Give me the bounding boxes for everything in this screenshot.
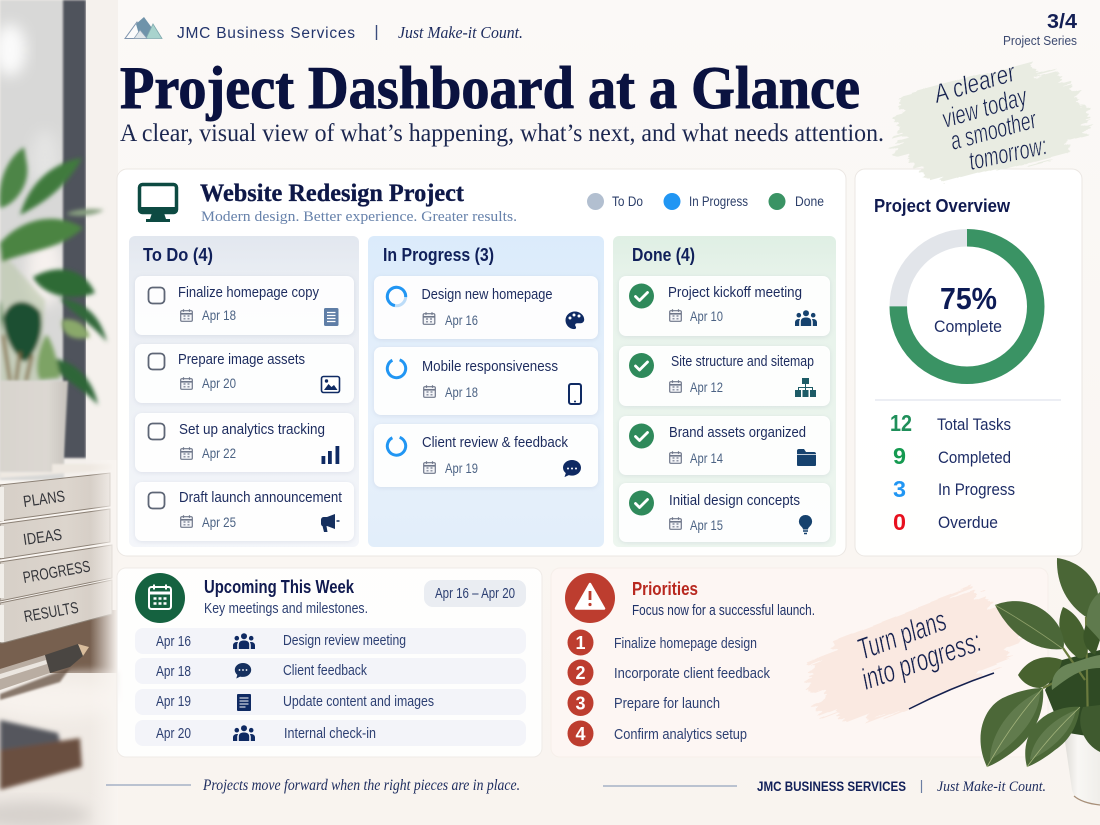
priority 2: Incorporate client feedback [614, 666, 771, 682]
logo: JMC mountains [125, 17, 162, 38]
callout: A clearer view today a smoother tomorrow: view today [938, 81, 1032, 134]
row: Apr 19 update content and images: Apr 19 [156, 694, 191, 710]
date range chip: Apr 16 – Apr 20 [435, 586, 515, 602]
priority 1: Finalize homepage design [614, 636, 757, 652]
task: Client review & feedback: Apr 19 [445, 461, 478, 476]
notebook [0, 720, 82, 790]
task: Set up analytics tracking [135, 413, 354, 472]
plant: potted plant bottom right [980, 558, 1100, 805]
priority 4: 4 [575, 724, 586, 744]
priority 4: Confirm analytics setup [614, 727, 747, 743]
books stack: PROGRESS [22, 558, 92, 587]
callout: A clearer view today a smoother tomorrow: tomorrow: [966, 130, 1050, 176]
task: Brand assets organized: Brand assets organized [669, 424, 806, 441]
callout: Turn plans into progress: into progress: [858, 625, 986, 697]
row: Apr 18 client feedback [135, 658, 526, 684]
overview heading: Project Overview [874, 195, 1011, 216]
donut chart 75% [898, 238, 1036, 375]
panel: upcoming this week [117, 568, 542, 757]
panel: project overview [855, 169, 1082, 556]
stat: completed [893, 443, 1011, 469]
stat: in progress: 3 [893, 476, 906, 502]
books stack [0, 473, 112, 643]
stat: overdue: 0 [893, 509, 906, 535]
task: Project kickoff meeting: Project kickoff meeting [668, 284, 802, 301]
footer brand: JMC BUSINESS SERVICES [757, 779, 906, 794]
books stack: RESULTS [23, 600, 80, 626]
task: Design new homepage: Apr 16 [445, 313, 478, 328]
column: In Progress [368, 236, 604, 547]
task: Draft launch announcement: Draft launch announcement [179, 489, 343, 506]
task: Initial design concepts: Apr 15 [690, 518, 723, 533]
legend [587, 193, 824, 210]
task: Finalize homepage copy: Apr 18 [202, 308, 236, 323]
brand tagline: Just Make-it Count. [398, 23, 523, 42]
task: Project kickoff meeting: Apr 10 [690, 309, 723, 324]
callout: Turn plans into progress: Turn plans [853, 604, 951, 667]
row: Apr 20 internal check-in: Apr 20 [156, 726, 191, 742]
row: Apr 16 design review meeting [135, 628, 526, 654]
callout: A clearer view today a smoother tomorrow: a smoother [947, 104, 1040, 156]
task: Site structure and sitemap: Apr 12 [690, 380, 723, 395]
task: Project kickoff meeting [619, 276, 830, 336]
project title: Website Redesign Project [200, 180, 465, 207]
column heading: To Do (4) [143, 245, 213, 265]
blurred left plant [0, 147, 107, 405]
stat: in progress: In Progress [938, 480, 1015, 499]
footer brand: Just Make-it Count. [937, 779, 1046, 795]
dark foliage cluster [1045, 650, 1100, 738]
priorities subtitle: Focus now for a successful launch. [632, 603, 815, 619]
priority 3: Prepare for launch [614, 696, 720, 712]
donut chart 75%: 75% [940, 281, 997, 316]
stat: total tasks: Total Tasks [937, 415, 1011, 434]
footer quote: Projects move forward when the right pieces are in place. [202, 777, 520, 794]
task: Brand assets organized: Apr 14 [690, 451, 723, 466]
column: Done [613, 236, 836, 547]
pot [0, 381, 68, 472]
priority 1 [568, 630, 757, 656]
books stack: IDEAS [22, 527, 63, 549]
task: Finalize homepage copy: Finalize homepage copy [178, 284, 319, 301]
stat: overdue [893, 509, 998, 535]
panel: priorities [551, 568, 1048, 757]
row: Apr 20 internal check-in [135, 720, 526, 746]
upcoming subtitle: Key meetings and milestones. [204, 601, 368, 617]
priorities heading: Priorities [632, 579, 698, 599]
stat: completed: Completed [938, 448, 1011, 467]
icon: monitor [139, 184, 177, 222]
stat: total tasks: 12 [890, 410, 912, 436]
task: Client review & feedback [374, 424, 598, 487]
title: Project Dashboard at a Glance [120, 55, 860, 121]
date range chip [424, 580, 526, 607]
column: To Do [129, 236, 359, 547]
books stack: PLANS [22, 488, 66, 511]
task: Design new homepage: Design new homepage [422, 286, 552, 303]
callout: A clearer view today a smoother tomorrow: A clearer [929, 57, 1019, 109]
project tagline: Modern design. Better experience. Greater results. [201, 209, 517, 225]
legend: To Do [612, 194, 643, 209]
task: Initial design concepts: Initial design concepts [669, 492, 800, 509]
panel: project board [117, 169, 846, 556]
footer brand [603, 779, 1046, 795]
stat: completed: 9 [893, 443, 906, 469]
icon: calendar badge [135, 573, 185, 623]
row: Apr 16 design review meeting: Design review meeting [283, 633, 406, 649]
donut chart 75%: Complete [934, 317, 1002, 336]
task: Site structure and sitemap: Site structure and sitemap [671, 353, 814, 370]
legend: In Progress [689, 194, 748, 209]
priority 4 [568, 720, 747, 746]
row: Apr 18 client feedback: Client feedback [283, 663, 368, 679]
task: Finalize homepage copy [135, 276, 354, 335]
stat: overdue: Overdue [938, 513, 998, 532]
priority 2 [568, 660, 771, 686]
row: Apr 20 internal check-in: Internal check-in [284, 726, 376, 742]
task: Mobile responsiveness: Apr 18 [445, 385, 478, 400]
series number: Project Series [1003, 33, 1077, 48]
task: Prepare image assets [135, 344, 354, 403]
task: Site structure and sitemap [619, 346, 830, 406]
column heading: In Progress (3) [383, 245, 494, 265]
pen [0, 644, 89, 700]
task: Draft launch announcement [135, 482, 354, 541]
column heading: Done (4) [632, 245, 695, 265]
upcoming heading: Upcoming This Week [204, 577, 355, 597]
task: Client review & feedback: Client review & feedback [422, 434, 568, 451]
series number [1003, 11, 1078, 48]
stat: in progress [893, 476, 1015, 502]
priority 1: 1 [575, 633, 586, 653]
legend: Done [795, 194, 824, 209]
priority 3: 3 [575, 694, 586, 714]
background photo: window, plant, books, pen and notebook [0, 0, 125, 825]
brand name: JMC Business Services [177, 25, 355, 42]
desk [0, 610, 118, 676]
stat: total tasks [890, 410, 1011, 436]
series number: 3/4 [1047, 11, 1078, 33]
white pot [1063, 728, 1100, 805]
icon: warning badge [565, 573, 615, 623]
priority 3 [568, 690, 720, 716]
task: Initial design concepts [619, 483, 830, 542]
task: Set up analytics tracking: Apr 22 [202, 446, 236, 461]
row: Apr 19 update content and images [135, 689, 526, 715]
task: Prepare image assets: Apr 20 [202, 376, 236, 391]
callout: A clearer view today a smoother tomorrow [883, 52, 1097, 196]
row: Apr 18 client feedback: Apr 18 [156, 664, 191, 680]
subtitle: A clear, visual view of what’s happening, what’s next, and what needs attention. [120, 120, 884, 147]
task: Design new homepage [374, 276, 598, 339]
task: Prepare image assets: Prepare image assets [178, 351, 305, 368]
row: Apr 16 design review meeting: Apr 16 [156, 634, 191, 650]
task: Mobile responsiveness [374, 347, 598, 415]
task: Draft launch announcement: Apr 25 [202, 515, 236, 530]
callout: Turn plans into progress [795, 576, 1033, 739]
task: Mobile responsiveness: Mobile responsiveness [422, 358, 558, 375]
priority 2: 2 [575, 663, 586, 683]
task: Brand assets organized [619, 416, 830, 475]
task: Set up analytics tracking: Set up analytics tracking [179, 421, 325, 438]
row: Apr 19 update content and images: Update content and images [283, 694, 434, 710]
